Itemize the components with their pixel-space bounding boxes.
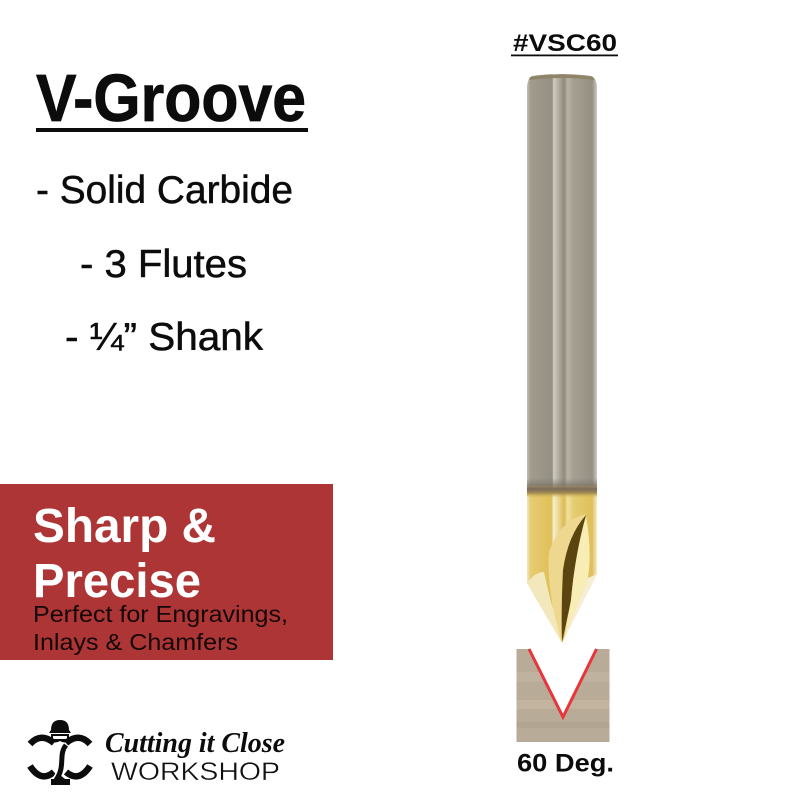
V cut opening (529, 649, 596, 718)
flute relief (549, 514, 586, 643)
logo (30, 720, 285, 786)
feature: shank: - ¼” Shank (65, 316, 264, 359)
feature list (36, 169, 293, 359)
flute bright face (564, 516, 590, 638)
panel description: Perfect for Engravings, (33, 601, 288, 627)
panel heading: Sharp & (33, 500, 216, 553)
panel: sharp and precise (0, 484, 333, 660)
router bit photo (527, 74, 597, 643)
title: V-Groove (36, 61, 306, 136)
logo script name: Cutting it Close (105, 727, 285, 759)
panel heading (33, 500, 216, 608)
gold body with cone (527, 480, 597, 643)
steel shank (527, 74, 597, 486)
icon: worker logo mark (30, 720, 90, 785)
heat tint band (527, 478, 597, 498)
groove sample (516, 649, 610, 742)
feature: flutes: - 3 Flutes (80, 243, 247, 286)
C curls (30, 738, 90, 776)
angle label: 60 Deg. (517, 750, 614, 778)
feature: solid carbide: - Solid Carbide (36, 169, 293, 212)
panel heading: Precise (33, 555, 201, 608)
part number: #VSC60 (513, 30, 617, 57)
boots (51, 775, 70, 785)
60 degree red profile (529, 649, 596, 717)
flute cutting edge (562, 515, 586, 642)
panel description (33, 601, 288, 655)
panel description: Inlays & Chamfers (33, 629, 238, 655)
logo workshop word: WORKSHOP (111, 758, 280, 786)
cone facets (527, 572, 562, 643)
goggles (51, 734, 69, 742)
central S stem (56, 745, 66, 780)
shank top edge (529, 74, 595, 80)
hard hat (49, 720, 71, 733)
